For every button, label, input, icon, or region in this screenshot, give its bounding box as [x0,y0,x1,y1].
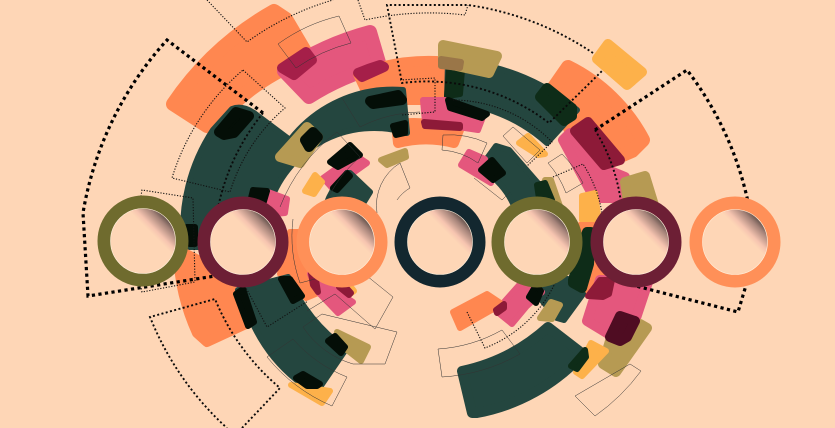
black overlap bottom-left a [236,289,254,326]
dark overlap lower right [571,350,586,369]
dark sliver near fifth ring [537,183,552,205]
outline lower third ring a [307,276,393,329]
outline left inner arc [280,132,360,207]
gold sliver near fifth ring [545,180,563,215]
dotted inner arc left [217,113,263,247]
teal arc bottom right [462,327,583,413]
thin dotted arc top right [453,100,552,166]
black overlap gold [305,132,318,147]
thin dotted rectangle top centre [400,78,435,115]
thin outlines layer [267,16,641,416]
pink arc top [284,32,380,97]
thick dotted sector right [595,70,748,312]
dark teal column [573,232,591,288]
thin dotted lines at right inner [553,164,602,213]
black block lower left of second ring [187,227,195,244]
gold block bottom-left [337,332,368,361]
ring 2 maroon [204,203,282,281]
black bar top centre [448,100,487,118]
dark red small lower right [496,304,504,313]
pink and orange overlap [282,52,312,75]
teal arc large left [183,90,407,247]
outline top centre [342,98,420,127]
orange arc lower-left [178,250,246,342]
outline bottom right [575,364,641,416]
orange inner band top centre [396,123,459,143]
yellow sliver [342,282,354,294]
pink small centre-left [323,155,367,188]
yellow strip bottom-left [291,385,330,403]
ring 4 navy [401,203,479,281]
orange band top centre [358,61,458,104]
black overlap small centre-left [333,173,350,190]
outline centre arc [376,163,410,213]
gold small lower right [540,302,560,319]
pink below third ring [310,274,353,313]
gold block lower right [603,324,647,372]
ring 5 olive [498,203,576,281]
black overlap bottom-left b [281,279,302,301]
black gold overlap bottom-left [328,336,345,353]
pink arc lower right [587,280,648,341]
gold block left [280,127,318,163]
gold and orange overlap [441,59,461,68]
outline top right small c [503,127,540,163]
thin dotted sector left [172,70,285,192]
ring row [104,202,774,281]
teal arc top-right [447,61,577,143]
yellow block top-right [597,44,642,85]
dark overlap teal and orange right [540,88,572,121]
dotted right inner [595,130,622,213]
outline third ring left [292,219,315,283]
thin dotted frame behind first rings [140,190,195,292]
ring 7 orange [696,203,774,281]
yellow small right [519,136,545,155]
thin dotted lower right arc [467,279,557,348]
teal small centre-left [326,173,370,205]
teal arc lower-left [238,277,346,387]
orange arc top-left [173,11,309,127]
pink top overlap with orange [358,65,384,77]
dark overlap teal and gold [447,70,462,96]
gold block top [443,45,497,73]
ring 6 maroon [597,203,675,281]
teal small right [480,146,555,215]
pink arc right [563,133,630,198]
pink arc small lower right [496,284,542,324]
outline lower third ring b [303,314,397,364]
orange behind third ring [280,232,345,298]
ring 1 olive [104,202,182,280]
black overlap top [370,95,402,104]
orange band right [552,67,643,163]
orange small lower right [453,294,502,328]
dark red overlap right [575,122,620,165]
dark red top centre [424,122,460,128]
arc shapes layer [173,11,657,413]
outline bottom centre [438,330,520,377]
black bar centre-left [330,145,360,167]
wine overlap lower right [610,316,635,341]
yellow block lower right [576,343,606,376]
outline top right small b [548,154,583,193]
outline on bottom-left teal [267,339,347,406]
medium dotted bottom sector [150,299,280,428]
ring 3 orange [303,203,381,281]
black overlap small lower right [529,285,541,303]
thin dotted bottom-left sector [245,286,308,327]
yellow small left [305,175,322,194]
teal small lower right [540,279,583,320]
medium dotted top sector [387,5,602,123]
outline top rectangle [278,16,351,68]
gold small top centre [381,151,406,165]
dark red below third ring [311,273,318,292]
black overlap small top [393,123,405,135]
outline top right small a [442,135,487,163]
thin dotted top line [207,0,468,42]
pink small right [461,152,491,183]
yellow block above fifth ring [582,193,599,222]
dark red behind sixth ring [588,280,612,297]
black overlap small right [481,160,503,180]
dark red sliver [339,283,351,295]
gold block right [625,176,657,215]
black block behind second ring [248,190,267,210]
black overlap orange and teal left [219,112,249,135]
thick dotted sector left [83,40,263,296]
dotted outlines layer [83,0,748,428]
pink small top centre [423,100,483,130]
orange behind sixth ring [580,225,615,298]
black overlap bottom-left d [296,374,320,386]
pink behind second ring [264,192,287,215]
outline near pink small [474,178,510,200]
